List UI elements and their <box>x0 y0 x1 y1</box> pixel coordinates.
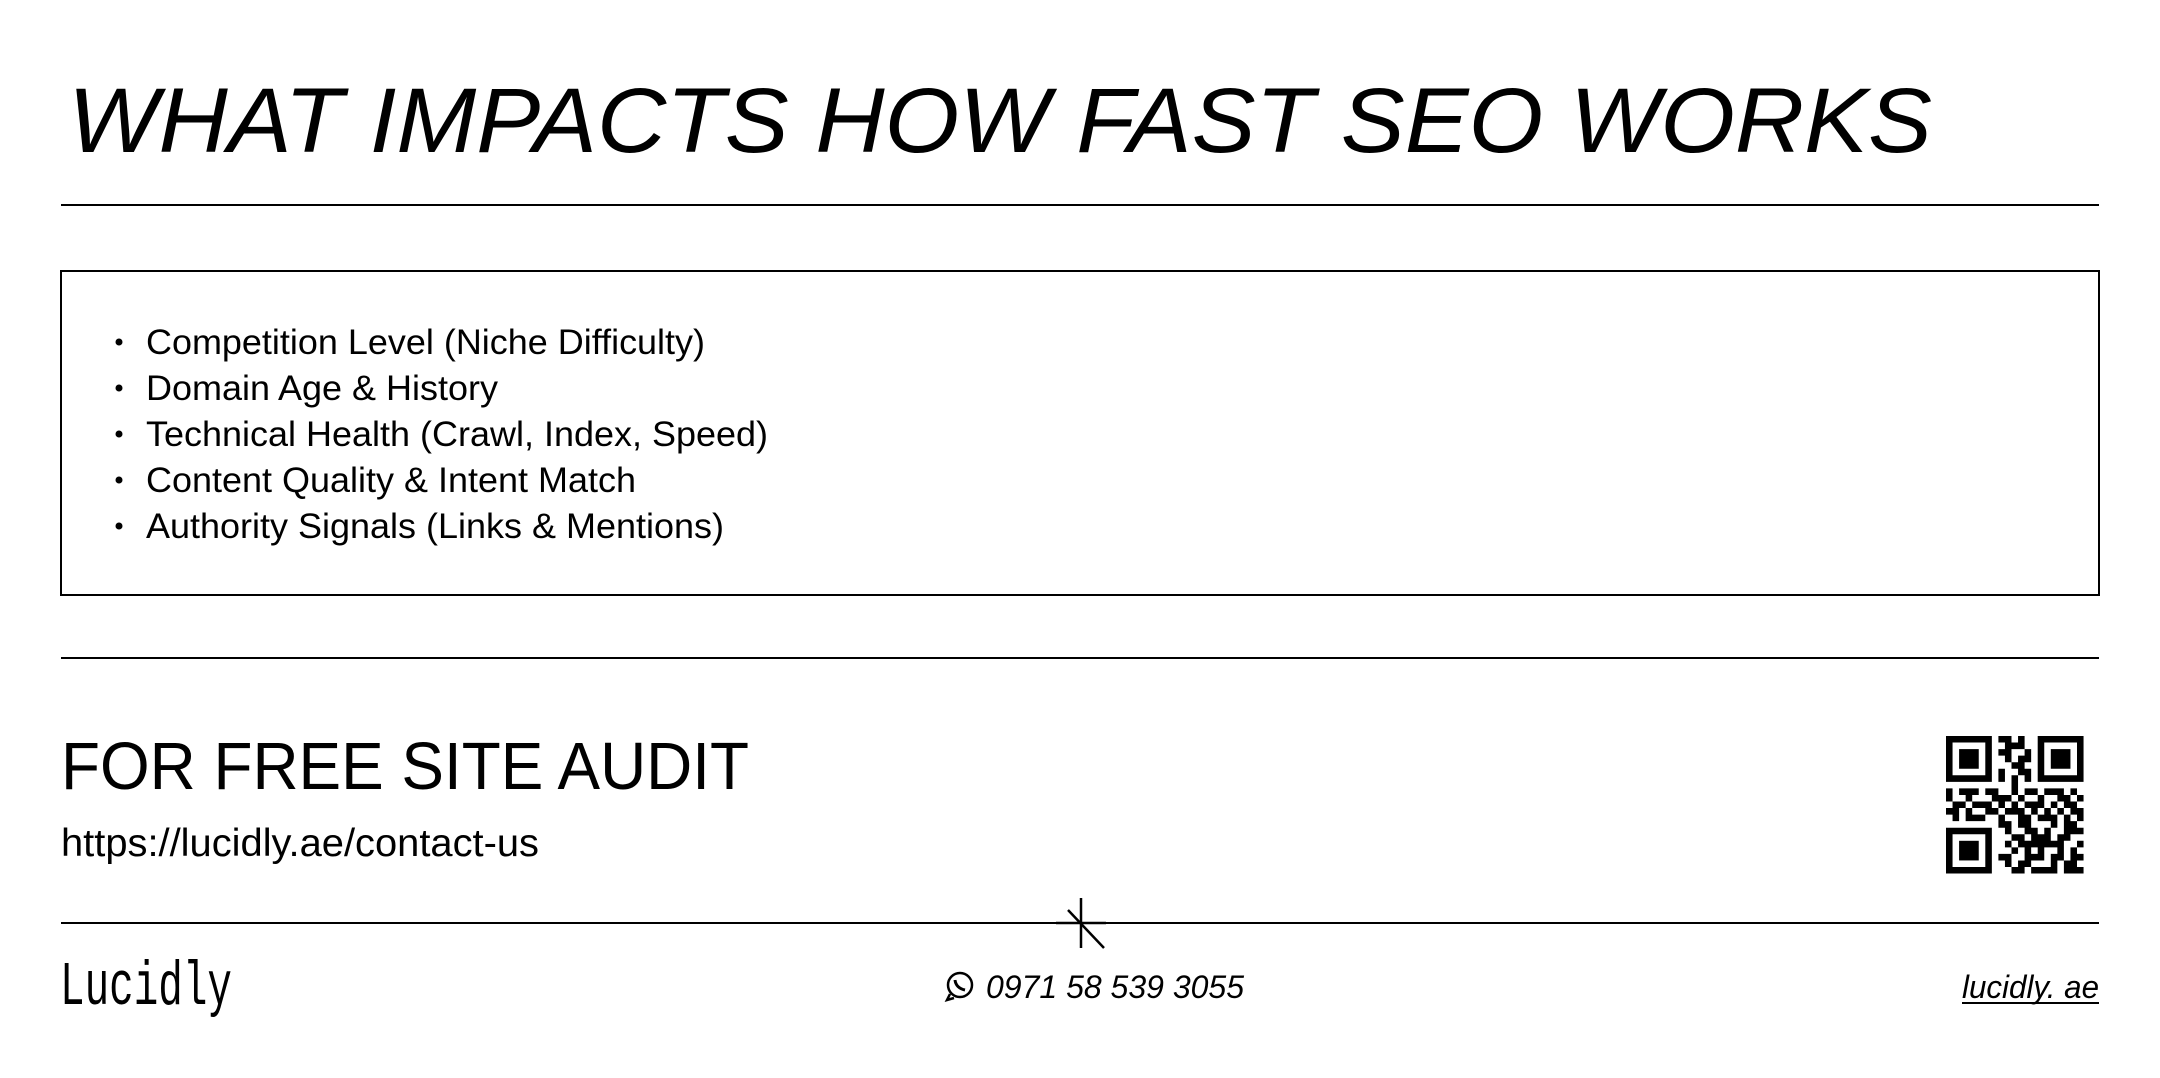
bullet list: Authority Signals (Links & Mentions) <box>146 507 724 546</box>
icon: star burst <box>1056 898 1106 948</box>
bullet list: Domain Age & History <box>146 369 498 408</box>
bullet list <box>116 323 768 546</box>
bullet list: Technical Health (Crawl, Index, Speed) <box>146 415 768 454</box>
icon: whatsapp <box>947 973 972 1000</box>
bullet list: Competition Level (Niche Difficulty) <box>146 323 705 362</box>
title: WHAT IMPACTS HOW FAST SEO WORKS <box>68 70 1932 172</box>
bullet list: Content Quality & Intent Match <box>146 461 636 500</box>
contact: phone: 0971 58 539 3055 <box>986 969 1244 1005</box>
logo: Lucidly: Lucidly <box>60 952 232 1023</box>
QR code <box>1946 736 2084 874</box>
CTA url: https://lucidly.ae/contact-us <box>61 822 539 865</box>
panel: factors list <box>61 271 2099 595</box>
website link: lucidly. ae <box>1962 969 2099 1005</box>
CTA heading: FOR FREE SITE AUDIT <box>61 729 749 804</box>
